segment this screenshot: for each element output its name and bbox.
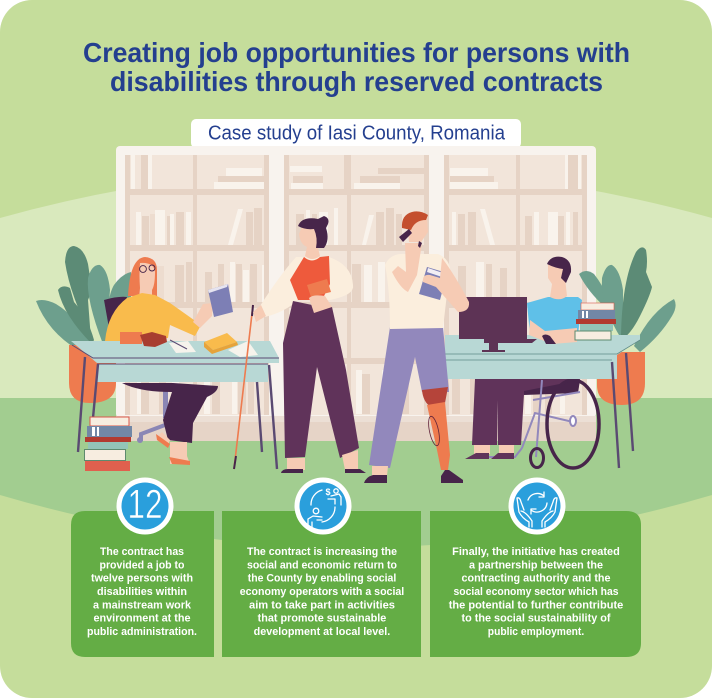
card: first result: disabilities within	[97, 586, 187, 598]
card: first result: twelve persons with	[91, 573, 193, 585]
standing man with prosthetic leg	[364, 211, 469, 483]
hand	[309, 295, 332, 313]
card: second result: The contract is increasing the	[247, 546, 397, 558]
card: third result	[430, 511, 641, 657]
big wheel	[547, 380, 599, 468]
chair	[104, 297, 168, 443]
face	[139, 263, 155, 298]
arm holding book	[423, 258, 469, 312]
stack of books: right	[575, 303, 616, 340]
title: disabilities through reserved contracts	[110, 66, 603, 97]
books: middle panel	[290, 155, 424, 414]
knee socket	[422, 387, 448, 407]
face	[407, 216, 428, 242]
shoes and foot	[364, 466, 463, 483]
card: third result: contracting authority and the	[462, 573, 611, 585]
hair	[547, 257, 571, 283]
desk: right	[445, 297, 640, 468]
hair	[128, 257, 157, 296]
books: right panel	[450, 155, 581, 414]
forearm and prosthetic hand	[120, 332, 167, 347]
orange book	[307, 279, 331, 297]
trousers	[472, 379, 580, 445]
card: second result: aim to take part in activities	[249, 599, 395, 611]
icon: number 12: 12	[128, 481, 162, 527]
icon: hands with circular arrows	[508, 478, 566, 534]
face	[548, 264, 564, 284]
wheelchair frame	[470, 380, 580, 457]
card: third result: public employment.	[488, 626, 584, 638]
shirt	[527, 297, 582, 335]
neck and face	[299, 222, 320, 259]
trousers	[369, 327, 449, 468]
white cane	[234, 305, 253, 469]
blouse	[260, 257, 353, 317]
yellow book	[204, 333, 237, 350]
card: first result: public administration.	[87, 626, 197, 638]
seated man's arm and mouse	[529, 320, 577, 344]
icon: number 12	[116, 478, 174, 534]
vest	[290, 256, 330, 300]
card: second result: the County by enabling social	[248, 573, 396, 585]
glasses	[140, 265, 155, 272]
card: first result	[71, 511, 214, 657]
hair	[298, 216, 328, 248]
card: second result	[222, 511, 421, 657]
document	[228, 341, 258, 357]
desk: left	[71, 333, 279, 469]
icon: social and economic return	[294, 478, 352, 534]
shirt	[385, 254, 450, 329]
raised arm	[392, 243, 422, 292]
computer monitor	[459, 297, 537, 352]
card: third result: the potential to further contribute	[449, 599, 623, 611]
card: third result: a partnership between the	[469, 559, 603, 571]
card: third result: to the social sustainability of	[462, 613, 611, 625]
icon: social and economic return: $	[325, 487, 331, 497]
stack of books: left	[84, 417, 132, 471]
hair	[402, 211, 428, 230]
card: third result: Finally, the initiative has created	[452, 546, 620, 558]
card: first result: provided a job to	[100, 559, 185, 571]
card: first result: a mainstream work	[93, 599, 191, 611]
caster wheel	[530, 448, 544, 468]
title: Creating job opportunities for persons with	[83, 37, 630, 68]
book	[419, 267, 447, 300]
prosthetic detail	[426, 415, 442, 447]
plant: left	[36, 246, 131, 403]
books: left panel	[131, 155, 264, 414]
card: first result: The contract has	[100, 546, 184, 558]
woman with cane	[253, 216, 366, 473]
woman at desk	[104, 257, 233, 465]
wheelchair seat	[524, 380, 580, 395]
feet	[156, 432, 190, 465]
card: second result: social and economic return to	[247, 559, 398, 571]
paper	[169, 341, 196, 353]
card: first result: environment at the	[94, 613, 191, 625]
card: third result: social economy sector which has	[454, 586, 619, 598]
neck	[550, 278, 567, 299]
arm and hand	[193, 303, 213, 328]
legs	[122, 383, 218, 443]
plant: right	[579, 247, 676, 405]
left hand	[253, 305, 266, 322]
ankles and shoes	[281, 450, 366, 473]
book	[208, 284, 233, 317]
card: second result: development at local level.	[254, 626, 390, 638]
shirt	[105, 293, 201, 345]
feet	[465, 445, 514, 459]
phone	[399, 229, 422, 248]
bookshelf	[116, 146, 596, 441]
subtitle label: Case study of Iasi County, Romania	[208, 122, 506, 144]
prosthetic leg	[427, 402, 450, 470]
card: second result: economy operators with a social	[240, 586, 404, 598]
man in wheelchair	[465, 257, 599, 468]
card: second result: that promote sustainable	[258, 613, 386, 625]
trousers	[283, 301, 359, 458]
title	[83, 37, 630, 97]
